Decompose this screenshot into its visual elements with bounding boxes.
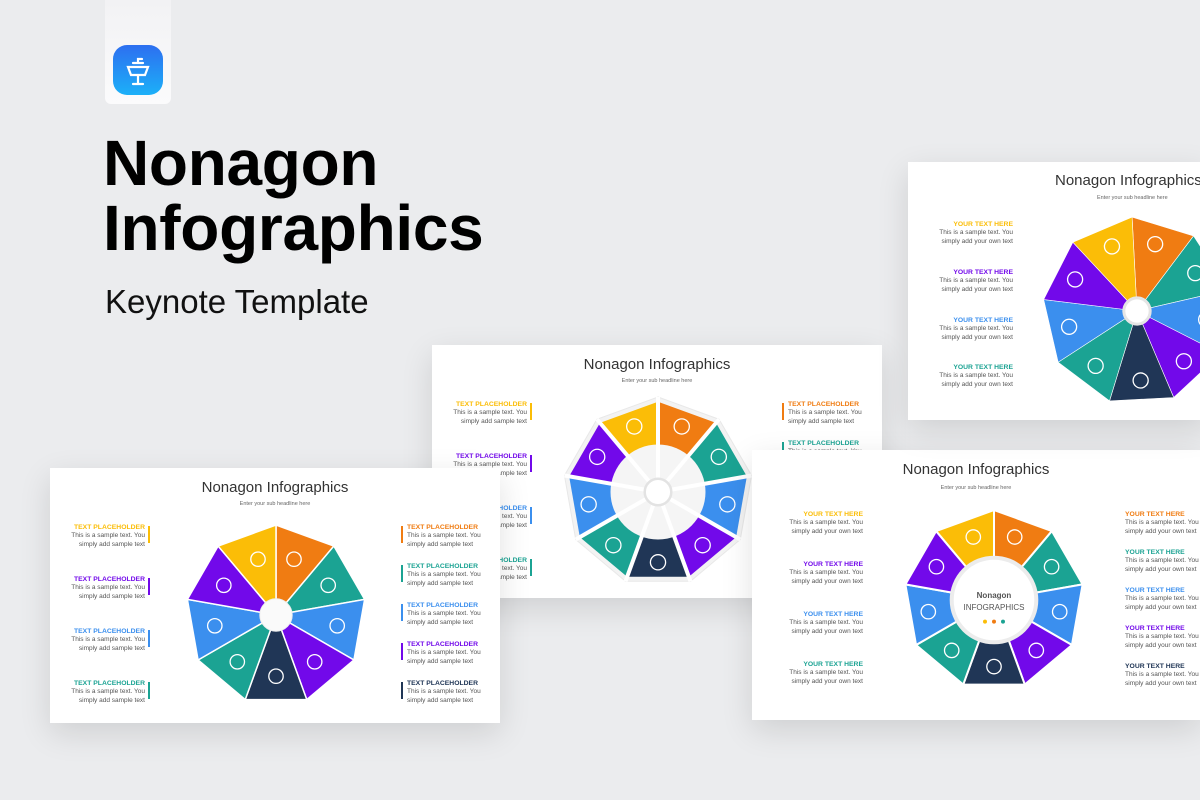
panel: left slide: This is a sample text. You [71, 584, 145, 591]
panel: bottom-right slide: This is a sample text. You [789, 569, 863, 576]
panel: top-right slide: YOUR TEXT HERE [953, 317, 1013, 324]
panel: bottom-right slide: simply add your own text [1125, 566, 1197, 572]
panel: bottom-right slide: YOUR TEXT HERE [1125, 663, 1185, 670]
text blocks: left [71, 524, 150, 704]
panel: left slide: simply add sample text [407, 580, 473, 586]
panel: top-right slide: simply add your own text [941, 238, 1013, 244]
text blocks: right [782, 401, 862, 464]
panel: left slide: simply add sample text [407, 696, 473, 704]
panel: bottom-right slide [752, 450, 1200, 720]
panel: top-right slide: simply add your own text [941, 334, 1013, 340]
text blocks: left [453, 401, 532, 580]
panel: top-right slide: Nonagon Infographics [1055, 172, 1200, 189]
panel: bottom-right slide: simply add your own text [1125, 642, 1197, 648]
panel: middle slide: This is a sample text. You [453, 513, 527, 520]
panel: top-right slide: YOUR TEXT HERE [953, 221, 1013, 228]
panel: left slide: TEXT PLACEHOLDER [74, 680, 145, 687]
chart: pinwheel nonagon [188, 526, 364, 699]
center label: INFOGRAPHICS [964, 603, 1024, 612]
panel: middle slide: This is a sample text. You [788, 409, 862, 416]
panel: bottom-right slide: This is a sample text. You [789, 669, 863, 676]
panel: middle slide: TEXT PLACEHOLDER [788, 401, 859, 408]
panel: middle slide: simply add sample text [788, 456, 854, 464]
panel: middle slide: This is a sample text. You [453, 461, 527, 468]
panel: bottom-right slide: YOUR TEXT HERE [1125, 511, 1185, 518]
title: Infographics [103, 192, 483, 264]
center label [964, 591, 1024, 612]
panel: bottom-right slide: This is a sample text. You [1125, 595, 1199, 602]
panel: left slide: TEXT PLACEHOLDER [407, 524, 478, 531]
panel: middle slide: TEXT PLACEHOLDER [456, 401, 527, 408]
panel: left slide: Enter your sub headline here [240, 501, 310, 507]
panel: top-right slide: This is a sample text. You [939, 277, 1013, 284]
panel: bottom-right slide: YOUR TEXT HERE [1125, 549, 1185, 556]
panel: left slide: This is a sample text. You [407, 610, 481, 617]
panel: middle slide: simply add sample text [461, 418, 527, 424]
panel: left slide: TEXT PLACEHOLDER [74, 628, 145, 635]
panel: left slide: simply add sample text [79, 644, 145, 652]
panel: left slide: simply add sample text [407, 618, 473, 626]
title: Nonagon [103, 127, 378, 199]
subtitle: Keynote Template [105, 283, 369, 320]
panel: middle slide: TEXT PLACEHOLDER [456, 453, 527, 460]
panel: left slide: This is a sample text. You [407, 649, 481, 656]
panel: left slide: TEXT PLACEHOLDER [407, 602, 478, 609]
panel: bottom-right slide: simply add your own text [791, 528, 863, 534]
panel: top-right slide: This is a sample text. You [939, 229, 1013, 236]
panel: middle slide: Nonagon Infographics [584, 356, 730, 373]
panel: top-right slide: simply add your own text [941, 380, 1013, 388]
panel: top-right slide: This is a sample text. You [939, 372, 1013, 379]
panel: left slide: simply add sample text [79, 540, 145, 548]
chart: tilted nonagon [1044, 217, 1200, 401]
panel: top-right slide: YOUR TEXT HERE [953, 364, 1013, 371]
panel: left slide: This is a sample text. You [71, 636, 145, 643]
panel: left slide: TEXT PLACEHOLDER [74, 524, 145, 531]
panel: bottom-right slide: This is a sample text. You [1125, 671, 1199, 678]
panel: bottom-right slide: simply add your own text [1125, 604, 1197, 610]
panel: middle slide: This is a sample text. You [788, 448, 862, 455]
center label: Nonagon [977, 591, 1011, 600]
text blocks: right [401, 524, 481, 704]
text blocks: right [1125, 511, 1199, 686]
panel: top-right slide: YOUR TEXT HERE [953, 269, 1013, 276]
panel: top-right slide: Enter your sub headline here [1097, 195, 1168, 201]
panel: middle slide: This is a sample text. You [453, 409, 527, 416]
panel: bottom-right slide: simply add your own text [791, 578, 863, 584]
panel: middle slide: This is a sample text. You [453, 565, 527, 572]
panel: bottom-right slide: YOUR TEXT HERE [803, 661, 863, 668]
panel: bottom-right slide: This is a sample text. You [1125, 519, 1199, 526]
panel: left slide: This is a sample text. You [71, 688, 145, 695]
panel: left slide: TEXT PLACEHOLDER [74, 576, 145, 583]
panel: left slide: TEXT PLACEHOLDER [407, 680, 478, 687]
panel: left slide: TEXT PLACEHOLDER [407, 563, 478, 570]
panel: bottom-right slide: simply add your own text [1125, 680, 1197, 686]
panel: bottom-right slide: YOUR TEXT HERE [803, 511, 863, 518]
panel: left slide: simply add sample text [79, 696, 145, 704]
panel: left slide: This is a sample text. You [407, 571, 481, 578]
panel: left slide: Nonagon Infographics [202, 479, 348, 496]
panel: left slide: simply add sample text [407, 540, 473, 548]
panel: middle slide [432, 345, 882, 598]
panel: left slide: TEXT PLACEHOLDER [407, 641, 478, 648]
panel: bottom-right slide: This is a sample text. You [1125, 557, 1199, 564]
chart: segmented nonagon [564, 396, 752, 582]
panel: left slide: simply add sample text [79, 592, 145, 600]
panel: left slide: This is a sample text. You [71, 532, 145, 539]
panel: middle slide: TEXT PLACEHOLDER [788, 440, 859, 447]
panel: top-right slide: simply add your own text [941, 286, 1013, 292]
panel: bottom-right slide: This is a sample text. You [789, 519, 863, 526]
icon: keynote logo [113, 45, 163, 95]
text blocks: left [789, 511, 863, 684]
logo card [105, 0, 171, 104]
panel: bottom-right slide: YOUR TEXT HERE [803, 561, 863, 568]
panel: bottom-right slide: YOUR TEXT HERE [1125, 587, 1185, 594]
panel: middle slide: Enter your sub headline here [622, 378, 692, 384]
panel: left slide: This is a sample text. You [407, 532, 481, 539]
text blocks: left [939, 221, 1013, 388]
panel: bottom-right slide: Nonagon Infographics [903, 461, 1049, 478]
panel: bottom-right slide: This is a sample text. You [1125, 633, 1199, 640]
panel: left slide [50, 468, 500, 723]
panel: middle slide: simply add sample text [461, 470, 527, 476]
panel: middle slide: TEXT PLACEHOLDER [456, 505, 527, 512]
panel: bottom-right slide: Enter your sub headline here [941, 485, 1011, 491]
panel: bottom-right slide: YOUR TEXT HERE [803, 611, 863, 618]
panel: bottom-right slide: simply add your own text [791, 678, 863, 684]
panel: bottom-right slide: simply add your own text [1125, 528, 1197, 534]
panel: bottom-right slide: YOUR TEXT HERE [1125, 625, 1185, 632]
panel: middle slide: simply add sample text [788, 418, 854, 424]
panel: left slide: simply add sample text [407, 658, 473, 664]
panel: middle slide: simply add sample text [461, 574, 527, 580]
panel: top-right slide: This is a sample text. You [939, 325, 1013, 332]
chart: nonagon with center label [906, 512, 1082, 684]
panel: middle slide: TEXT PLACEHOLDER [456, 557, 527, 564]
panel: bottom-right slide: simply add your own text [791, 628, 863, 634]
panel: bottom-right slide: This is a sample text. You [789, 619, 863, 626]
panel: top-right slide [908, 162, 1200, 420]
panel: left slide: This is a sample text. You [407, 688, 481, 695]
title [103, 127, 483, 264]
panel: middle slide: simply add sample text [461, 522, 527, 528]
